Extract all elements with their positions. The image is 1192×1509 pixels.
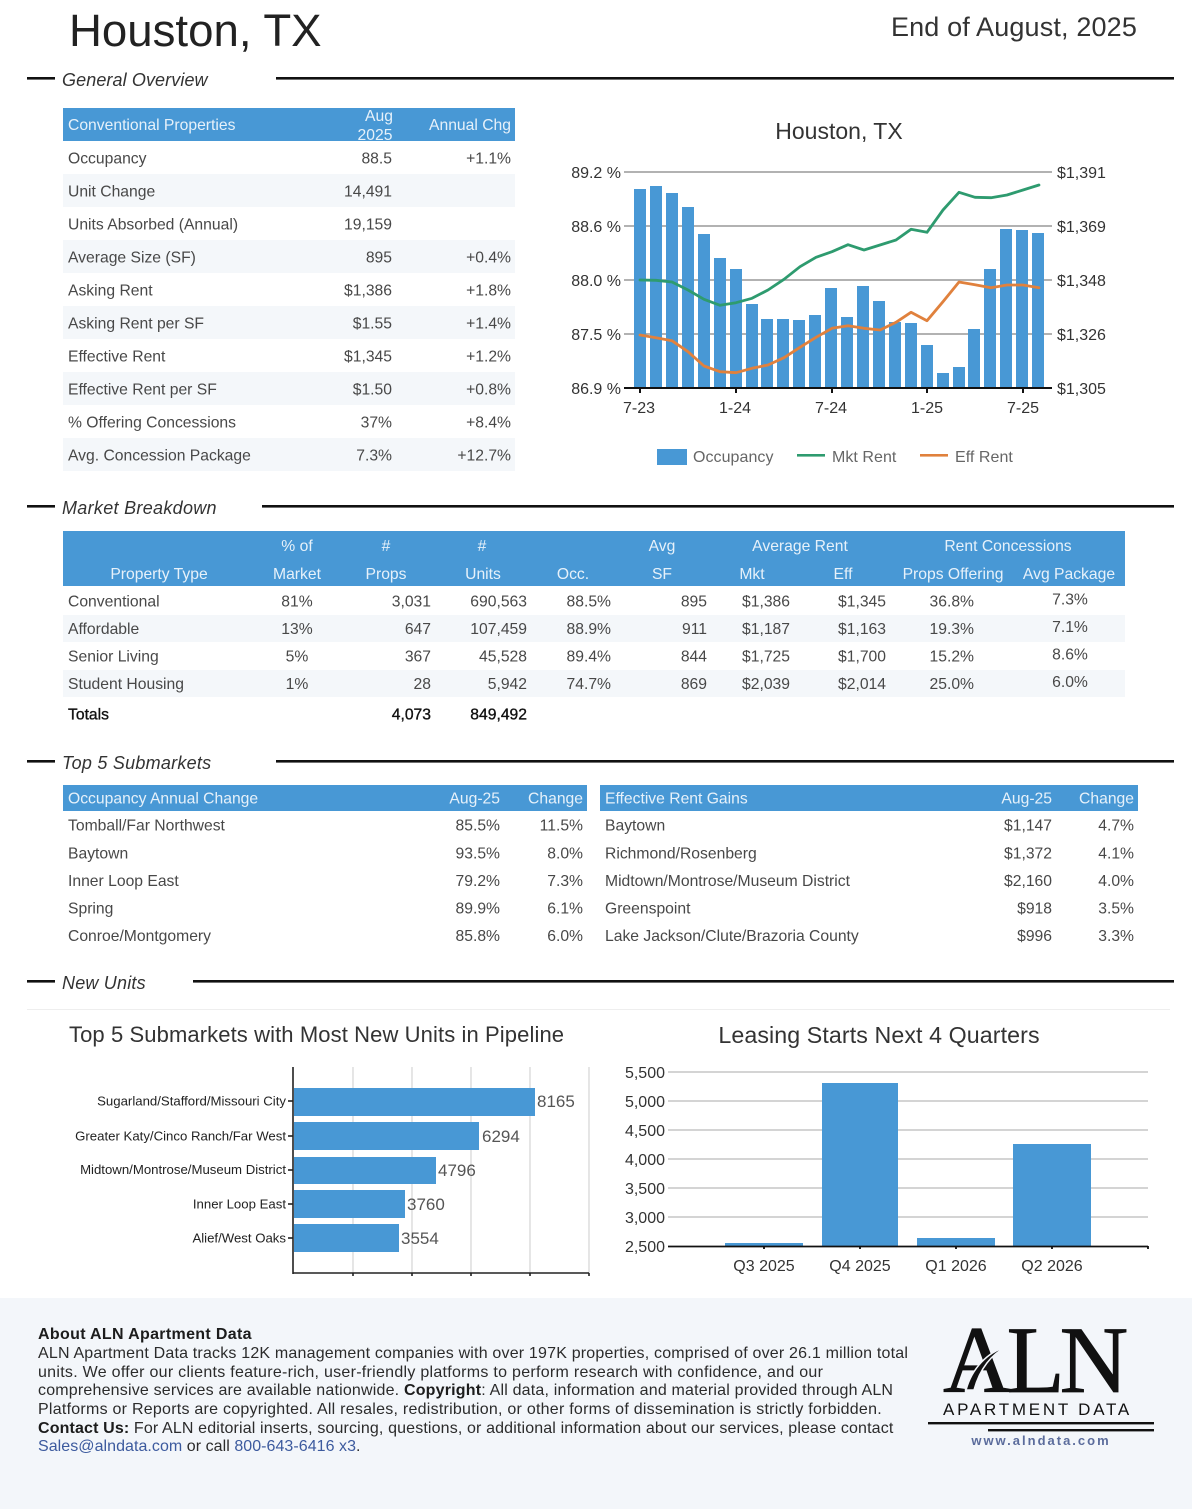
table header: SF	[652, 566, 672, 583]
chart: top 5 submarkets new units	[69, 1022, 589, 1276]
row: Affordable: $1,163	[838, 621, 886, 638]
category labels: Midtown/Montrose/Museum District	[80, 1162, 286, 1177]
row: Conventional: 7.3%	[1052, 592, 1088, 608]
row: Affordable: 911	[682, 621, 707, 638]
date labels: 1-25	[911, 400, 943, 417]
row: Affordable: 647	[405, 621, 431, 638]
table header: % of	[281, 538, 313, 555]
quarter labels: Q1 2026	[925, 1258, 987, 1275]
y axis labels: 5,500	[625, 1065, 665, 1082]
quarter labels: Q2 2026	[1021, 1258, 1083, 1275]
left axis labels: 89.2 %	[571, 165, 621, 182]
y axis labels: 2,500	[625, 1239, 665, 1256]
table header: Props	[366, 566, 407, 583]
panel: market breakdown table	[63, 531, 1125, 724]
table rows: 11.5%	[540, 818, 583, 834]
logo: ALN Apartment Data: APARTMENT DATA	[943, 1400, 1132, 1419]
footer panel	[0, 1298, 1192, 1509]
about text block: ALN Apartment Data tracks 12K management companies with over 197K properties, comprised of over 26.1 million total	[38, 1345, 908, 1362]
row: Student Housing: 6.0%	[1052, 674, 1088, 691]
heading: Top 5 Submarkets: Top 5 Submarkets	[62, 753, 211, 773]
axes	[288, 1067, 589, 1276]
right axis labels: $1,348	[1057, 273, 1106, 290]
grid lines	[624, 172, 1052, 334]
table header: Aug-25	[1001, 790, 1052, 808]
logo: ALN Apartment Data: www.alndata.com	[970, 1433, 1111, 1448]
row: Conventional: $1,345	[838, 594, 886, 610]
left axis labels	[571, 165, 621, 398]
y axis labels: 5,000	[625, 1094, 665, 1111]
table rows: Unit Change	[68, 184, 155, 200]
chart axis	[624, 388, 1052, 393]
date labels: 7-25	[1007, 400, 1039, 417]
table rows: Asking Rent	[68, 282, 153, 300]
table header: Avg	[649, 538, 675, 555]
row: Conventional: 88.5%	[567, 594, 611, 610]
row: Student Housing: 25.0%	[930, 676, 974, 693]
value labels: 4796	[438, 1161, 476, 1180]
table header: Units	[465, 566, 501, 583]
table rows: $996	[1017, 928, 1052, 945]
table rows: Conroe/Montgomery	[68, 928, 211, 945]
category labels: Inner Loop East	[193, 1196, 286, 1212]
chart: leasing starts next 4 quarters	[625, 1022, 1148, 1275]
bars	[294, 1088, 535, 1252]
date labels: 7-24	[815, 400, 847, 417]
table rows: +1.4%	[466, 316, 511, 332]
table rows: $2,160	[1004, 873, 1052, 890]
row: Student Housing: 5,942	[488, 676, 527, 693]
table rows: Greenspoint	[605, 900, 691, 918]
table header: Average Rent	[752, 538, 848, 555]
quarter labels	[733, 1258, 1083, 1275]
row: Senior Living	[68, 646, 1088, 666]
row: Conventional: 3,031	[392, 594, 431, 610]
row: Totals: 4,073	[392, 706, 431, 724]
row: Student Housing: 1%	[286, 676, 308, 693]
row: Conventional: 36.8%	[930, 594, 974, 610]
about text block	[38, 1326, 908, 1455]
table rows: +0.8%	[466, 382, 511, 398]
table header: Avg Package	[1023, 566, 1115, 583]
table header: Props Offering	[903, 566, 1003, 583]
table rows: +8.4%	[466, 414, 511, 432]
table rows: 37%	[361, 414, 392, 432]
market rent line	[640, 185, 1039, 305]
table rows: 4.7%	[1098, 818, 1134, 834]
grid lines	[353, 1067, 589, 1273]
value labels: 3554	[401, 1229, 439, 1248]
right axis labels: $1,305	[1057, 381, 1106, 398]
row stripes	[63, 174, 515, 471]
y axis labels: 4,000	[625, 1152, 665, 1169]
row: Totals: 849,492	[470, 706, 527, 724]
panel: effective rent gains table	[600, 785, 1138, 945]
y axis labels: 4,500	[625, 1123, 665, 1140]
table header	[600, 785, 1138, 811]
table header	[63, 108, 515, 144]
logo: ALN Apartment Data	[928, 1307, 1154, 1448]
table rows	[605, 818, 1134, 945]
table rows	[68, 150, 511, 464]
row: Student Housing: $2,039	[742, 676, 790, 693]
table rows: 85.8%	[456, 928, 500, 945]
table rows: $1,345	[344, 348, 392, 366]
about text block: comprehensive services are available nationwide. Copyright: All data, information and material provided through ALN	[38, 1382, 893, 1399]
table header: #	[382, 538, 391, 555]
heading: Market Breakdown: Market Breakdown	[62, 498, 217, 518]
y axis labels: 3,000	[625, 1210, 665, 1227]
chart: Houston occupancy and rent	[571, 118, 1106, 466]
table rows: +1.1%	[466, 150, 511, 168]
logo: ALN Apartment Data: ALN	[943, 1307, 1127, 1413]
grid lines	[668, 1072, 1148, 1217]
quarter labels: Q3 2025	[733, 1258, 795, 1275]
table rows: % Offering Concessions	[68, 414, 236, 432]
table rows: Richmond/Rosenberg	[605, 846, 757, 862]
title: Houston, TX	[69, 5, 322, 56]
table header: Conventional Properties	[68, 117, 236, 134]
table rows: 93.5%	[456, 846, 500, 862]
table rows: +0.4%	[466, 250, 511, 266]
about text block: Sales@alndata.com or call 800-643-6416 x3.	[38, 1438, 361, 1455]
table rows: Asking Rent per SF	[68, 316, 204, 332]
chart legend: Occupancy	[693, 449, 774, 466]
table rows: +1.8%	[466, 282, 511, 300]
row: Senior Living: 844	[681, 648, 707, 666]
table rows: +12.7%	[457, 448, 511, 464]
category labels: Greater Katy/Cinco Ranch/Far West	[75, 1128, 286, 1144]
effective rent line	[640, 282, 1039, 373]
table rows	[68, 818, 583, 945]
table rows: 4.0%	[1098, 873, 1134, 890]
table rows: $1,372	[1004, 846, 1052, 862]
row: Affordable	[68, 619, 1088, 638]
table rows: 7.3%	[356, 448, 392, 464]
chart legend: Eff Rent	[955, 449, 1013, 466]
table header: 2025	[358, 127, 393, 144]
row: Affordable: 19.3%	[930, 621, 974, 638]
table header: Change	[1079, 790, 1134, 808]
table rows: 7.3%	[547, 873, 583, 890]
about text block: Platforms or Reports are copyrighted. All resales, redistribution, or other forms of dissemination is strictly forbidden.	[38, 1401, 882, 1418]
row: Student Housing: 869	[681, 676, 707, 693]
table rows: $918	[1017, 900, 1052, 918]
row: Affordable: 88.9%	[567, 621, 611, 638]
row: Conventional	[68, 592, 1088, 610]
y axis labels	[625, 1065, 665, 1256]
table rows: 19,159	[344, 216, 392, 234]
row: Senior Living: 15.2%	[930, 648, 974, 666]
table header: Aug-25	[449, 790, 500, 808]
table rows: 4.1%	[1098, 846, 1134, 862]
chart title: Top 5 Submarkets with Most New Units in Pipeline	[69, 1022, 564, 1047]
table header: Annual Chg	[429, 117, 511, 134]
value labels: 8165	[537, 1092, 575, 1111]
table rows: $1,386	[344, 282, 392, 300]
table rows: 88.5	[361, 150, 392, 168]
table rows: Inner Loop East	[68, 873, 179, 890]
table header: Eff	[834, 566, 853, 583]
category labels: Alief/West Oaks	[192, 1230, 286, 1246]
row: Student Housing: 74.7%	[567, 676, 611, 693]
row: Totals: Totals	[68, 706, 109, 724]
about text block: units. We offer our clients feature-rich, user-friendly platforms to perform research with confidence, and our	[38, 1364, 824, 1381]
about text block: Contact Us: For ALN editorial inserts, sourcing, questions, or additional information about our services, please contact	[38, 1420, 894, 1437]
table rows: 89.9%	[456, 900, 500, 918]
row stripes	[63, 615, 1125, 697]
left axis labels: 87.5 %	[571, 327, 621, 344]
chart title: Houston, TX	[775, 118, 903, 144]
row: Student Housing: 28	[414, 676, 431, 693]
table header: Property Type	[110, 566, 208, 583]
table rows: Lake Jackson/Clute/Brazoria County	[605, 928, 859, 945]
table rows: Effective Rent	[68, 348, 166, 366]
table rows: 14,491	[344, 184, 392, 200]
row: Conventional: 895	[681, 594, 707, 610]
row: Conventional: 81%	[281, 594, 313, 610]
y axis labels: 3,500	[625, 1181, 665, 1198]
right axis labels	[1057, 165, 1106, 398]
row: Senior Living: 89.4%	[567, 648, 611, 666]
bars	[725, 1083, 1091, 1246]
value labels	[401, 1092, 575, 1248]
table rows: Average Size (SF)	[68, 250, 196, 266]
row: Affordable: 7.1%	[1052, 619, 1088, 636]
table rows: $1.55	[353, 316, 392, 332]
table rows: Tomball/Far Northwest	[68, 818, 226, 834]
table header: Market	[273, 566, 322, 583]
table header	[63, 531, 1125, 586]
table rows: Occupancy	[68, 150, 147, 168]
panel: occupancy annual change table	[63, 785, 587, 945]
table rows: Baytown	[605, 818, 665, 834]
row: Affordable: 13%	[281, 621, 313, 638]
category labels: Sugarland/Stafford/Missouri City	[97, 1094, 286, 1108]
right axis labels: $1,369	[1057, 219, 1106, 236]
value labels: 3760	[407, 1195, 445, 1214]
row: Senior Living: 5%	[286, 648, 308, 666]
table rows: 3.3%	[1098, 928, 1134, 945]
table rows: Midtown/Montrose/Museum District	[605, 873, 851, 890]
row: Senior Living: Senior Living	[68, 648, 159, 666]
chart legend: Mkt Rent	[832, 449, 897, 466]
baseline axis	[668, 1246, 1148, 1249]
right axis labels: $1,326	[1057, 327, 1106, 344]
row: Senior Living: 8.6%	[1052, 646, 1088, 664]
table rows: +1.2%	[466, 348, 511, 366]
about text block: About ALN Apartment Data	[38, 1326, 252, 1343]
chart title: Leasing Starts Next 4 Quarters	[718, 1022, 1040, 1048]
row: Affordable: $1,187	[742, 621, 790, 638]
table header: Occupancy Annual Change	[68, 790, 258, 808]
icon: logo swoosh	[966, 1347, 1006, 1390]
date labels: 1-24	[719, 400, 751, 417]
left axis labels: 86.9 %	[571, 381, 621, 398]
table rows: 85.5%	[456, 818, 500, 834]
table rows: $1,147	[1004, 818, 1052, 834]
report date: End of August, 2025	[891, 12, 1137, 42]
row: Senior Living: 367	[405, 648, 431, 666]
row: Conventional: Conventional	[68, 594, 160, 610]
date labels	[623, 400, 1039, 417]
row: Senior Living: $1,700	[838, 648, 886, 666]
row: Student Housing: Student Housing	[68, 676, 184, 693]
table rows: $1.50	[353, 382, 392, 398]
table header: Effective Rent Gains	[605, 790, 748, 808]
table rows: 79.2%	[456, 873, 500, 890]
row: Student Housing	[68, 674, 1088, 693]
table header	[63, 785, 587, 811]
table rows: Spring	[68, 900, 113, 918]
heading: General Overview: General Overview	[62, 70, 209, 90]
row: Affordable: Affordable	[68, 621, 140, 638]
table rows: 8.0%	[547, 846, 583, 862]
chart legend	[657, 449, 1013, 466]
row: Affordable: 107,459	[470, 621, 527, 638]
date labels: 7-23	[623, 400, 655, 417]
right axis labels: $1,391	[1057, 165, 1106, 182]
table header: Mkt	[739, 566, 765, 583]
table rows: 895	[366, 250, 392, 266]
panel: conventional properties table	[63, 108, 515, 471]
table rows: Units Absorbed (Annual)	[68, 216, 238, 234]
table header: Aug	[365, 108, 393, 125]
row: Conventional: 690,563	[470, 594, 527, 610]
table rows: Baytown	[68, 846, 128, 862]
value labels: 6294	[482, 1127, 520, 1146]
heading: New Units: New Units	[62, 973, 146, 993]
table rows: 6.0%	[547, 928, 583, 945]
table header: Rent Concessions	[944, 538, 1072, 555]
table header: #	[478, 538, 487, 555]
table rows: 3.5%	[1098, 900, 1134, 918]
category labels	[75, 1094, 286, 1246]
table rows: Avg. Concession Package	[68, 448, 251, 464]
row: Senior Living: 45,528	[479, 648, 527, 666]
table rows: Effective Rent per SF	[68, 382, 217, 398]
table header: Occ.	[557, 566, 589, 583]
left axis labels: 88.6 %	[571, 219, 621, 236]
row: Senior Living: $1,725	[742, 648, 790, 666]
quarter labels: Q4 2025	[829, 1258, 891, 1275]
row: Student Housing: $2,014	[838, 676, 886, 693]
row: Totals	[68, 706, 527, 724]
table rows: 6.1%	[547, 900, 583, 918]
occupancy bars	[634, 186, 1044, 388]
table header: Change	[528, 790, 583, 808]
left axis labels: 88.0 %	[571, 273, 621, 290]
row: Conventional: $1,386	[742, 594, 790, 610]
